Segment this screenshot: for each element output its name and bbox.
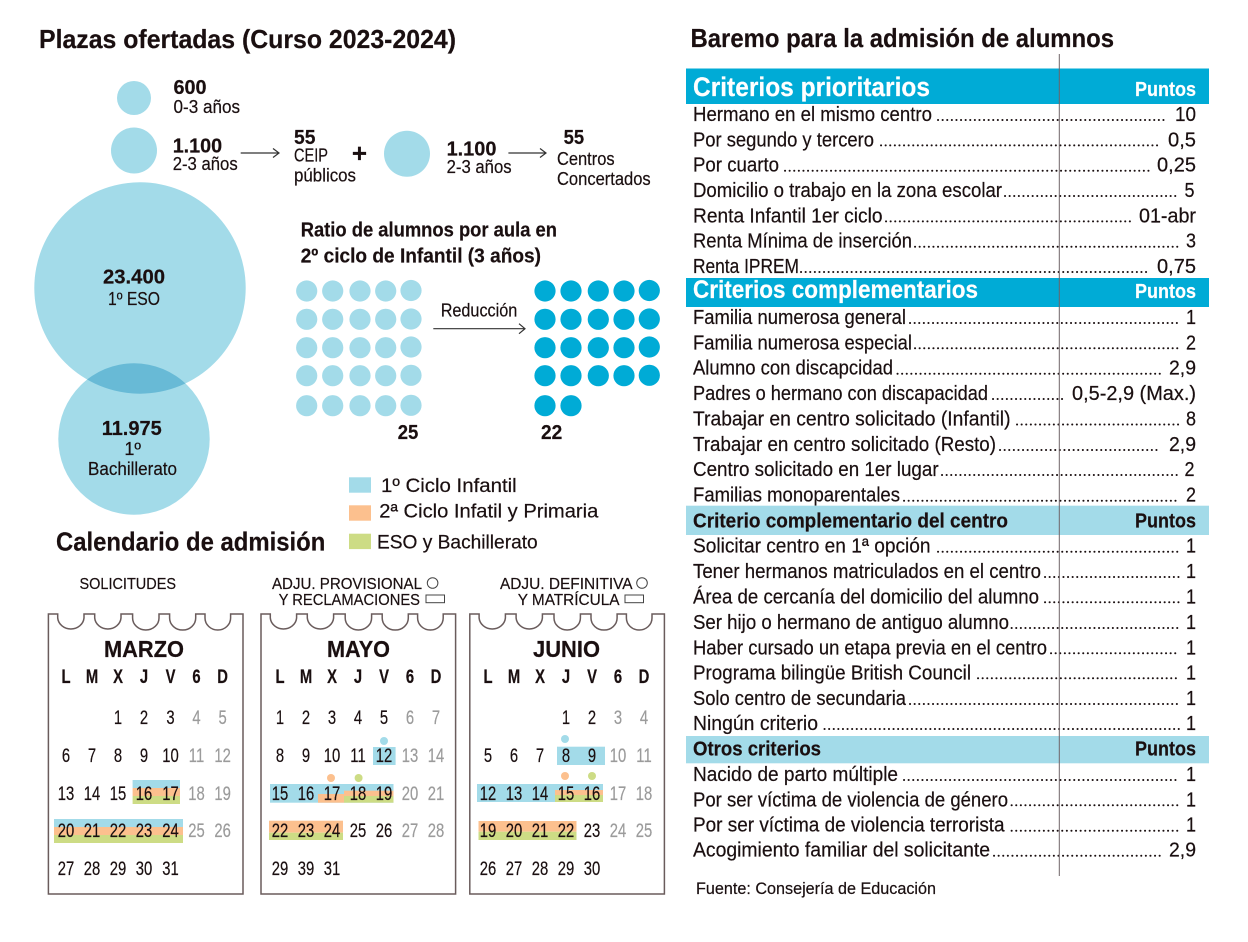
calendar: marzo: 26 (214, 819, 231, 842)
chart: 22 alumnos dots (534, 280, 660, 444)
panel: criterios complementarios: 0,5-2,9 (Max.) (1072, 383, 1196, 405)
calendar: mayo: 15 (272, 782, 288, 805)
calendar: junio: 30 (584, 857, 600, 880)
text: adjudicación provisional key: Y RECLAMACIONES (279, 592, 420, 609)
panel: criterio complementario del centro: Haber cursado un etapa previa en el centro (693, 637, 1047, 659)
calendar: marzo: 24 (162, 819, 179, 842)
panel: otros criterios: Nacido de parto múltiple (693, 764, 898, 786)
calendar: marzo: MARZO (104, 636, 184, 662)
calendar: mayo: 12 (376, 744, 392, 767)
panel: criterios complementarios: 2 (1184, 459, 1194, 481)
plus sign: + (352, 138, 367, 168)
heading: baremo: Baremo para la admisión de alumnos (690, 23, 1114, 53)
calendar: marzo: M (86, 665, 98, 688)
panel: criterios prioritarios: Domicilio o trabajo en la zona escolar (693, 180, 1002, 202)
calendar: junio: 1 (562, 706, 570, 729)
calendar: mayo: MAYO (327, 636, 390, 662)
calendar: mayo: V (379, 665, 389, 688)
panel: criterios complementarios: Familia numerosa especial (693, 332, 912, 354)
panel: criterios prioritarios: Renta Infantil 1er ciclo (693, 205, 882, 227)
panel: criterio complementario del centro (686, 506, 1209, 735)
text: 55 centros concertados (557, 127, 651, 189)
chart: 25 alumnos dots (296, 280, 422, 444)
panel: otros criterios: Por ser víctima de violencia terrorista (693, 815, 1005, 837)
panel: criterio complementario del centro: 1 (1186, 637, 1196, 659)
calendar: marzo (48, 614, 243, 894)
chart: 25 alumnos dots: 25 (398, 422, 418, 444)
calendar: marzo: 10 (162, 744, 179, 767)
arrow: reducción: Reducción (441, 301, 517, 321)
text: fuente: Fuente: Consejería de Educación (696, 879, 936, 898)
heading: ratio de alumnos por aula: Ratio de alumnos por aula en (301, 220, 557, 242)
calendar: marzo: 3 (166, 706, 175, 729)
panel: otros criterios (686, 736, 1209, 862)
circle: 11.975 1º Bachillerato: Bachillerato (88, 459, 177, 479)
calendar: marzo: 19 (214, 782, 231, 805)
calendar: junio: V (587, 665, 597, 688)
calendar: junio: L (483, 665, 493, 688)
circle: 11.975 1º Bachillerato (58, 363, 210, 515)
panel: criterios prioritarios: 01-abr (1139, 205, 1196, 227)
calendar: mayo: D (431, 665, 441, 688)
panel: criterios complementarios: 1 (1186, 307, 1196, 329)
panel: criterio complementario del centro: 1 (1186, 536, 1196, 558)
calendar: junio: 3 (614, 706, 622, 729)
calendar: marzo: 21 (84, 819, 100, 842)
panel: criterio complementario del centro: 1 (1186, 688, 1196, 710)
panel: criterio complementario del centro: 1 (1186, 612, 1196, 634)
panel: otros criterios: 1 (1186, 789, 1196, 811)
calendar: junio: 24 (610, 819, 627, 842)
legend (349, 476, 599, 553)
panel: criterios complementarios: Familia numerosa general (693, 307, 906, 329)
panel: criterio complementario del centro: Ser hijo o hermano de antiguo alumno (693, 612, 1009, 634)
header: criterios prioritarios: Criterios prioritarios (693, 72, 930, 102)
header: criterio complementario del centro: Criterio complementario del centro (693, 510, 1008, 532)
text: adjudicación definitiva key (500, 576, 647, 609)
calendar: mayo: 6 (406, 665, 414, 688)
panel: criterios prioritarios: 3 (1186, 231, 1196, 253)
panel: criterio complementario del centro: Solicitar centro en 1ª opción (693, 536, 930, 558)
calendar: marzo: 18 (188, 782, 205, 805)
text: 55 CEIP públicos (294, 127, 356, 186)
calendar: marzo: 7 (88, 744, 96, 767)
calendar: mayo: 8 (276, 744, 284, 767)
calendar: mayo: X (327, 665, 337, 688)
calendar: marzo: 31 (162, 857, 179, 880)
calendar: junio: 22 (558, 819, 574, 842)
calendar: marzo: 27 (58, 857, 74, 880)
panel: otros criterios: Acogimiento familiar del solicitante (693, 840, 990, 862)
calendar: mayo: 19 (376, 782, 392, 805)
circle: 1.100 plazas 2-3 años concertados (384, 131, 512, 177)
calendar: mayo: 28 (428, 819, 444, 842)
calendar: mayo: 13 (402, 744, 418, 767)
calendar: junio: 19 (480, 819, 496, 842)
arrow: to centros concertados (508, 148, 546, 158)
panel: criterios prioritarios: Hermano en el mismo centro (693, 104, 932, 126)
header: otros criterios: Otros criterios (693, 739, 821, 761)
calendar: junio: 4 (640, 706, 648, 729)
calendar: mayo: 18 (350, 782, 366, 805)
panel: criterios complementarios: Padres o hermano con discapacidad (693, 383, 988, 405)
calendar: junio: 10 (610, 744, 626, 767)
panel: criterios prioritarios: 5 (1184, 180, 1194, 202)
panel: criterios complementarios: 2,9 (1169, 358, 1196, 380)
calendar: marzo: V (166, 665, 176, 688)
calendar: junio: 11 (636, 744, 652, 767)
calendar: marzo: 16 (136, 782, 152, 805)
calendar: junio: 27 (506, 857, 522, 880)
text: solicitudes: SOLICITUDES (80, 576, 176, 593)
panel: otros criterios: 1 (1186, 764, 1196, 786)
calendar: mayo: 31 (324, 857, 340, 880)
calendar: mayo: 25 (350, 819, 366, 842)
header: criterios complementarios: Puntos (1135, 281, 1196, 303)
header: criterio complementario del centro: Puntos (1135, 510, 1196, 532)
heading: calendario de admisión: Calendario de admisión (56, 527, 325, 557)
panel: criterios complementarios: Trabajar en centro solicitado (Resto) (693, 434, 996, 456)
calendar: marzo: 12 (214, 744, 231, 767)
panel: criterios prioritarios: 10 (1175, 104, 1196, 126)
calendar: mayo: 1 (276, 706, 284, 729)
calendar: marzo: D (217, 665, 228, 688)
panel: criterios complementarios: Alumno con discapcidad (693, 358, 893, 380)
text: adjudicación provisional key (272, 576, 444, 609)
calendar: junio: 5 (484, 744, 492, 767)
calendar: marzo: 17 (162, 782, 179, 805)
calendar: junio: 16 (584, 782, 600, 805)
calendar: marzo: 5 (218, 706, 227, 729)
circle: 1.100 plazas 2-3 años públicos: 1.100 (173, 136, 222, 158)
header: criterios prioritarios (686, 68, 1209, 104)
calendar: marzo: J (140, 665, 148, 688)
heading: plazas ofertadas: Plazas ofertadas (Curso 2023-2024) (39, 24, 456, 54)
circle: 600 plazas 0-3 años: 0-3 años (174, 97, 240, 117)
panel: otros criterios: 1 (1186, 815, 1196, 837)
text: 55 centros concertados: Centros (557, 149, 615, 169)
calendar: mayo: 23 (298, 819, 314, 842)
panel: criterios complementarios: 8 (1186, 408, 1196, 430)
panel: criterios prioritarios: Por segundo y tercero (693, 129, 874, 151)
circle: 1.100 plazas 2-3 años concertados: 1.100 (447, 139, 496, 161)
panel: criterios complementarios (686, 276, 1209, 507)
calendar: junio: 21 (532, 819, 548, 842)
heading: ratio de alumnos por aula (301, 220, 557, 268)
circle: 600 plazas 0-3 años (117, 77, 240, 117)
calendar: marzo: 13 (58, 782, 74, 805)
calendar: marzo: L (61, 665, 71, 688)
calendar: marzo: 22 (110, 819, 126, 842)
panel: criterio complementario del centro: Solo centro de secundaria (693, 688, 907, 710)
panel: criterios complementarios: 2 (1186, 485, 1196, 507)
calendar: junio: M (508, 665, 520, 688)
header: otros criterios (686, 736, 1209, 763)
calendar: marzo: 9 (140, 744, 148, 767)
calendar: mayo: 16 (298, 782, 314, 805)
highlights: junio plazos (477, 735, 605, 840)
text: 55 centros concertados: 55 (564, 127, 584, 149)
text: adjudicación provisional key: ADJU. PROVISIONAL (272, 576, 422, 593)
header: criterios complementarios: Criterios complementarios (693, 276, 978, 304)
calendar: marzo: 28 (84, 857, 100, 880)
calendar: mayo: 6 (406, 706, 414, 729)
panel: criterio complementario del centro: 1 (1186, 662, 1196, 684)
calendar: mayo: 21 (428, 782, 444, 805)
calendar: junio: 23 (584, 819, 600, 842)
panel: criterios prioritarios: 0,25 (1157, 155, 1196, 177)
highlights: marzo solicitudes (54, 780, 183, 843)
circle: 23.400 1º ESO (34, 182, 246, 394)
calendar: mayo (261, 614, 456, 894)
panel: criterios complementarios: 2 (1186, 332, 1196, 354)
panel: criterio complementario del centro: Tener hermanos matriculados en el centro (693, 561, 1041, 583)
calendar: mayo: J (354, 665, 362, 688)
panel: criterio complementario del centro: 1 (1186, 586, 1196, 608)
calendar: mayo: 9 (302, 744, 310, 767)
legend: 2ª Ciclo Infatil y Primaria (379, 501, 599, 522)
calendar: mayo: 2 (302, 706, 310, 729)
text: 55 CEIP públicos: 55 (294, 127, 316, 149)
panel: criterios prioritarios: 0,75 (1157, 256, 1196, 278)
calendar: junio: 2 (588, 706, 596, 729)
calendar: junio: 20 (506, 819, 522, 842)
calendar: marzo: 6 (192, 665, 201, 688)
panel: criterio complementario del centro: 1 (1186, 713, 1196, 735)
calendar: junio: 14 (532, 782, 549, 805)
text: 55 CEIP públicos: CEIP (294, 146, 328, 166)
panel: otros criterios: 2,9 (1169, 840, 1196, 862)
arrow: to CEIP (241, 148, 279, 158)
chart: 22 alumnos dots: 22 (541, 422, 562, 444)
calendar: mayo: 14 (428, 744, 445, 767)
calendar: mayo: 17 (324, 782, 340, 805)
calendar: marzo: 20 (58, 819, 74, 842)
calendar: mayo: 5 (380, 706, 388, 729)
panel: criterios complementarios: Centro solicitado en 1er lugar (693, 459, 939, 481)
circle: 600 plazas 0-3 años: 600 (174, 77, 206, 99)
calendar: mayo: 29 (272, 857, 288, 880)
calendar: mayo: 26 (376, 819, 392, 842)
calendar: mayo: 4 (354, 706, 362, 729)
header: criterio complementario del centro (686, 506, 1209, 535)
panel: criterio complementario del centro: Ningún criterio (693, 713, 818, 735)
text: adjudicación definitiva key: ADJU. DEFINITIVA (500, 576, 633, 593)
calendar: junio: 7 (536, 744, 544, 767)
text: 55 CEIP públicos: públicos (294, 166, 356, 186)
panel: criterio complementario del centro: Área de cercanía del domicilio del alumno (693, 585, 1039, 608)
calendar: junio: 6 (614, 665, 622, 688)
header: criterios prioritarios: Puntos (1135, 79, 1196, 101)
calendar: junio: D (639, 665, 649, 688)
calendar: marzo: 15 (110, 782, 126, 805)
calendar: junio: 28 (532, 857, 548, 880)
calendar: mayo: M (300, 665, 312, 688)
calendar: mayo: 27 (402, 819, 418, 842)
panel: criterio complementario del centro: Programa bilingüe British Council (693, 662, 971, 684)
panel: criterios prioritarios (686, 68, 1209, 278)
panel: criterios prioritarios: Renta Mínima de inserción (693, 231, 912, 253)
calendar: junio: 6 (510, 744, 518, 767)
calendar: marzo: 29 (110, 857, 126, 880)
calendar: junio: 13 (506, 782, 522, 805)
circle: 1.100 plazas 2-3 años concertados: 2-3 años (447, 157, 512, 177)
header: otros criterios: Puntos (1135, 739, 1196, 761)
calendar: marzo: X (113, 665, 123, 688)
calendar: mayo: 39 (298, 857, 314, 880)
calendar: junio: 15 (558, 782, 574, 805)
calendar: junio: J (562, 665, 570, 688)
calendar: mayo: 24 (324, 819, 341, 842)
circle: 1.100 plazas 2-3 años públicos (111, 128, 238, 174)
legend: ESO y Bachillerato (377, 532, 538, 553)
panel: criterios prioritarios: Por cuarto (693, 155, 779, 177)
heading: ratio de alumnos por aula: 2º ciclo de Infantil (3 años) (301, 246, 541, 268)
panel: criterios prioritarios: Renta IPREM (693, 256, 799, 278)
calendar: junio: X (535, 665, 545, 688)
arrow: reducción (433, 301, 525, 334)
calendar: junio: 18 (636, 782, 652, 805)
circle: 1.100 plazas 2-3 años públicos: 2-3 años (173, 154, 238, 174)
text: adjudicación definitiva key: Y MATRÍCULA (518, 590, 620, 609)
calendar: marzo: 23 (136, 819, 152, 842)
calendar: junio: JUNIO (533, 636, 600, 662)
header: criterios complementarios (686, 276, 1209, 307)
calendar: marzo: 25 (188, 819, 205, 842)
calendar: junio: 9 (588, 744, 596, 767)
calendar: marzo: 14 (84, 782, 101, 805)
panel: otros criterios: Por ser víctima de violencia de género (693, 789, 1008, 811)
circle: 23.400 1º ESO: 1º ESO (108, 289, 160, 309)
legend: 1º Ciclo Infantil (381, 476, 517, 497)
panel: criterios complementarios: Familias monoparentales (693, 485, 900, 507)
calendar: junio: 12 (480, 782, 496, 805)
calendar: mayo: 10 (324, 744, 340, 767)
calendar: mayo: 22 (272, 819, 288, 842)
calendar: mayo: 11 (350, 744, 366, 767)
circle: 11.975 1º Bachillerato: 1º (124, 439, 141, 459)
panel: criterios complementarios: Trabajar en centro solicitado (Infantil) (693, 408, 1010, 430)
highlights: mayo plazos (269, 737, 396, 840)
calendar: junio: 25 (636, 819, 652, 842)
calendar: junio (470, 614, 664, 894)
panel: criterios complementarios: 2,9 (1169, 434, 1196, 456)
calendar: junio: 8 (562, 744, 570, 767)
calendar: marzo: 1 (114, 706, 122, 729)
circle: 11.975 1º Bachillerato: 11.975 (102, 418, 162, 440)
calendar: marzo: 30 (136, 857, 152, 880)
calendar: marzo: 2 (140, 706, 148, 729)
panel: criterio complementario del centro: 1 (1186, 561, 1196, 583)
calendar: mayo: L (275, 665, 285, 688)
calendar: marzo: 4 (192, 706, 201, 729)
text: 55 centros concertados: Concertados (557, 169, 651, 189)
panel: criterios prioritarios: 0,5 (1168, 129, 1196, 151)
calendar: marzo: 6 (62, 744, 70, 767)
calendar: mayo: 7 (432, 706, 440, 729)
calendar: junio: 26 (480, 857, 496, 880)
calendar: junio: 17 (610, 782, 626, 805)
circle: 23.400 1º ESO: 23.400 (103, 266, 165, 288)
calendar: junio: 29 (558, 857, 574, 880)
calendar: mayo: 3 (328, 706, 336, 729)
calendar: marzo: 11 (189, 744, 204, 767)
panel: plazas circles (34, 77, 651, 515)
calendar: mayo: 20 (402, 782, 418, 805)
calendar: marzo: 8 (114, 744, 122, 767)
